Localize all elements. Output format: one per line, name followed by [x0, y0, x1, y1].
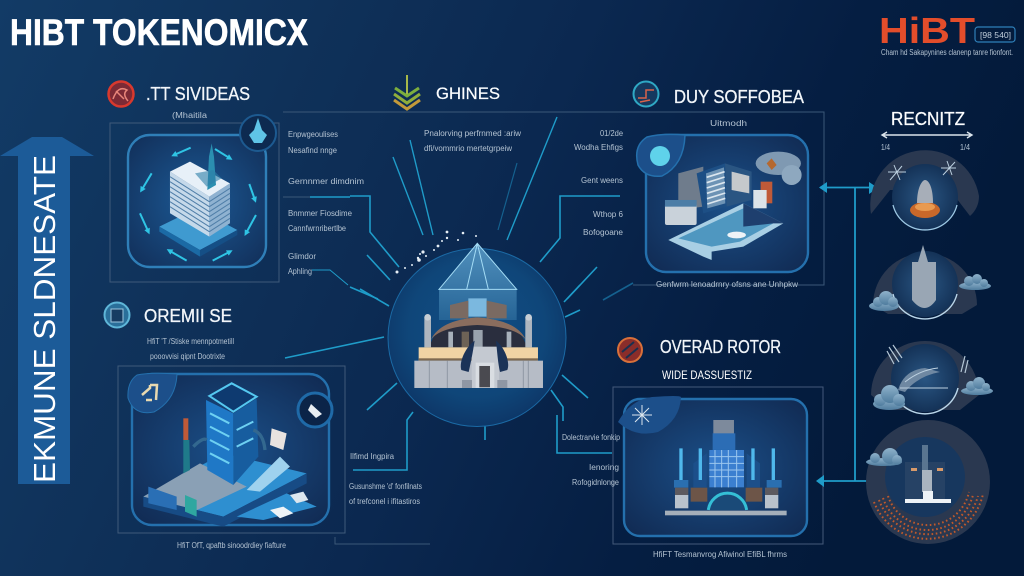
description: dfi/vommrio mertetgrpeiw — [424, 144, 512, 153]
clouds — [869, 274, 991, 311]
building illustration — [414, 243, 543, 388]
range labels: 1/4 — [960, 143, 970, 152]
heading: OVERAD ROTOR — [660, 337, 781, 357]
heading icon — [104, 302, 130, 328]
side notes: Cannfwrnribertlbe — [288, 224, 347, 233]
side notes: Ilfimd Ingpira — [350, 452, 395, 461]
range labels — [881, 143, 970, 152]
badge icon: droplet — [240, 115, 276, 151]
thin frame lines — [283, 112, 824, 544]
badge icon: cyan blob — [637, 134, 685, 176]
left vertical arrow banner — [0, 137, 94, 484]
range labels: 1/4 — [881, 143, 890, 152]
icon: chevrons — [394, 75, 420, 109]
side notes — [288, 130, 364, 276]
side notes: Glimdor — [288, 252, 316, 261]
side notes: Gusunshme 'd' fonfilnats — [349, 482, 422, 491]
outer frame — [110, 123, 279, 282]
panel: right column heading — [881, 109, 972, 152]
heading icon — [618, 338, 642, 362]
inner card — [624, 399, 807, 536]
side notes: Enpwgeoulises — [288, 130, 338, 139]
panel: bottom left — [104, 302, 422, 550]
panel: right column heading: RECNITZ — [891, 109, 965, 129]
side notes: Bnmmer Fiosdime — [288, 209, 353, 218]
inner card — [132, 374, 329, 525]
inner card — [128, 135, 266, 267]
panel: bottom right — [562, 337, 823, 559]
version tag: [98 540] — [980, 31, 1011, 40]
side notes — [574, 129, 624, 237]
panel: top middle — [394, 75, 521, 153]
subheading: (Mhaitila — [172, 111, 208, 120]
caption: HfiFT Tesmanvrog Afiwinol EfiBL fhrms — [653, 550, 787, 559]
description: Pnalorving perfrnmed :ariw — [424, 129, 521, 138]
banner text: EKMUNE SLDNESATE — [27, 155, 62, 483]
clouds — [873, 377, 993, 410]
step 1: lamp circle — [870, 150, 979, 230]
badge icon: snowflake bubble — [618, 396, 681, 434]
step 2: tower circle — [869, 245, 991, 319]
description — [147, 337, 234, 361]
outer frame — [118, 366, 345, 533]
description: HfiT 'T /Stiske mennpotmetill — [147, 337, 234, 346]
side notes: Wthop 6 — [593, 210, 624, 219]
subheading: Uitmodh — [710, 119, 747, 128]
caption: Genfwrm lenoadrnry ofsns ane Unhpkw — [656, 280, 798, 289]
ember dots — [874, 492, 983, 539]
virus icons — [888, 161, 956, 180]
inner card — [646, 135, 808, 272]
badge icon: dark seal — [298, 393, 332, 427]
circular arrows — [140, 148, 256, 261]
caption: HfiT OfT, qpaftb sinoodrdiey fiafture — [177, 541, 286, 550]
heading: .TT SIVIDEAS — [146, 84, 250, 104]
heading icon — [634, 82, 658, 106]
description — [424, 129, 521, 153]
central hub — [388, 231, 566, 426]
outer frame — [613, 387, 823, 544]
side notes: Ienoring — [589, 463, 619, 472]
heading icon: red emblem — [108, 82, 134, 106]
step 4: forge circle — [866, 420, 990, 544]
side notes: Dolectrarvie fonkip — [562, 433, 620, 442]
heading: GHINES — [436, 84, 500, 103]
side notes: Gent weens — [581, 176, 623, 185]
heading: OREMII SE — [144, 306, 232, 326]
side notes: Gernnmer dimdnim — [288, 177, 364, 186]
timeline connector with arrows — [816, 182, 888, 487]
data room illustration — [665, 152, 802, 260]
subheading: WIDE DASSUESTIZ — [662, 368, 752, 382]
side notes — [562, 433, 620, 487]
connector network around central hub — [285, 117, 633, 470]
logo: HiBT: HiBT — [879, 10, 975, 51]
panel: top right — [574, 82, 808, 289]
particles — [396, 231, 477, 274]
range arrow — [882, 132, 972, 138]
badge icon: crane — [128, 373, 177, 413]
side notes: Wodha Ehfigs — [574, 143, 623, 152]
side notes — [349, 452, 422, 506]
stacked document tower illustration — [159, 143, 237, 257]
side notes: 01/2de — [600, 129, 624, 138]
description: pooovvisi qipnt Dootrixte — [150, 352, 225, 361]
hub circle — [388, 248, 566, 426]
side notes: Bofogoane — [583, 228, 624, 237]
logo: HiBT — [879, 10, 1015, 57]
heading: DUY SOFFOBEA — [674, 87, 804, 107]
factory illustration — [665, 420, 787, 515]
server tower illustration — [143, 383, 317, 527]
side notes: Nesafind nnge — [288, 146, 338, 155]
side notes: Aphling — [288, 267, 312, 276]
panel: top left — [108, 82, 364, 282]
step 3: arcs circle — [871, 341, 993, 414]
cloud — [866, 448, 902, 466]
side notes: Rofogidnlonge — [572, 478, 619, 487]
title: HIBT TOKENOMICX — [10, 12, 308, 53]
side notes: of trefconel i ifitastiros — [349, 497, 420, 506]
